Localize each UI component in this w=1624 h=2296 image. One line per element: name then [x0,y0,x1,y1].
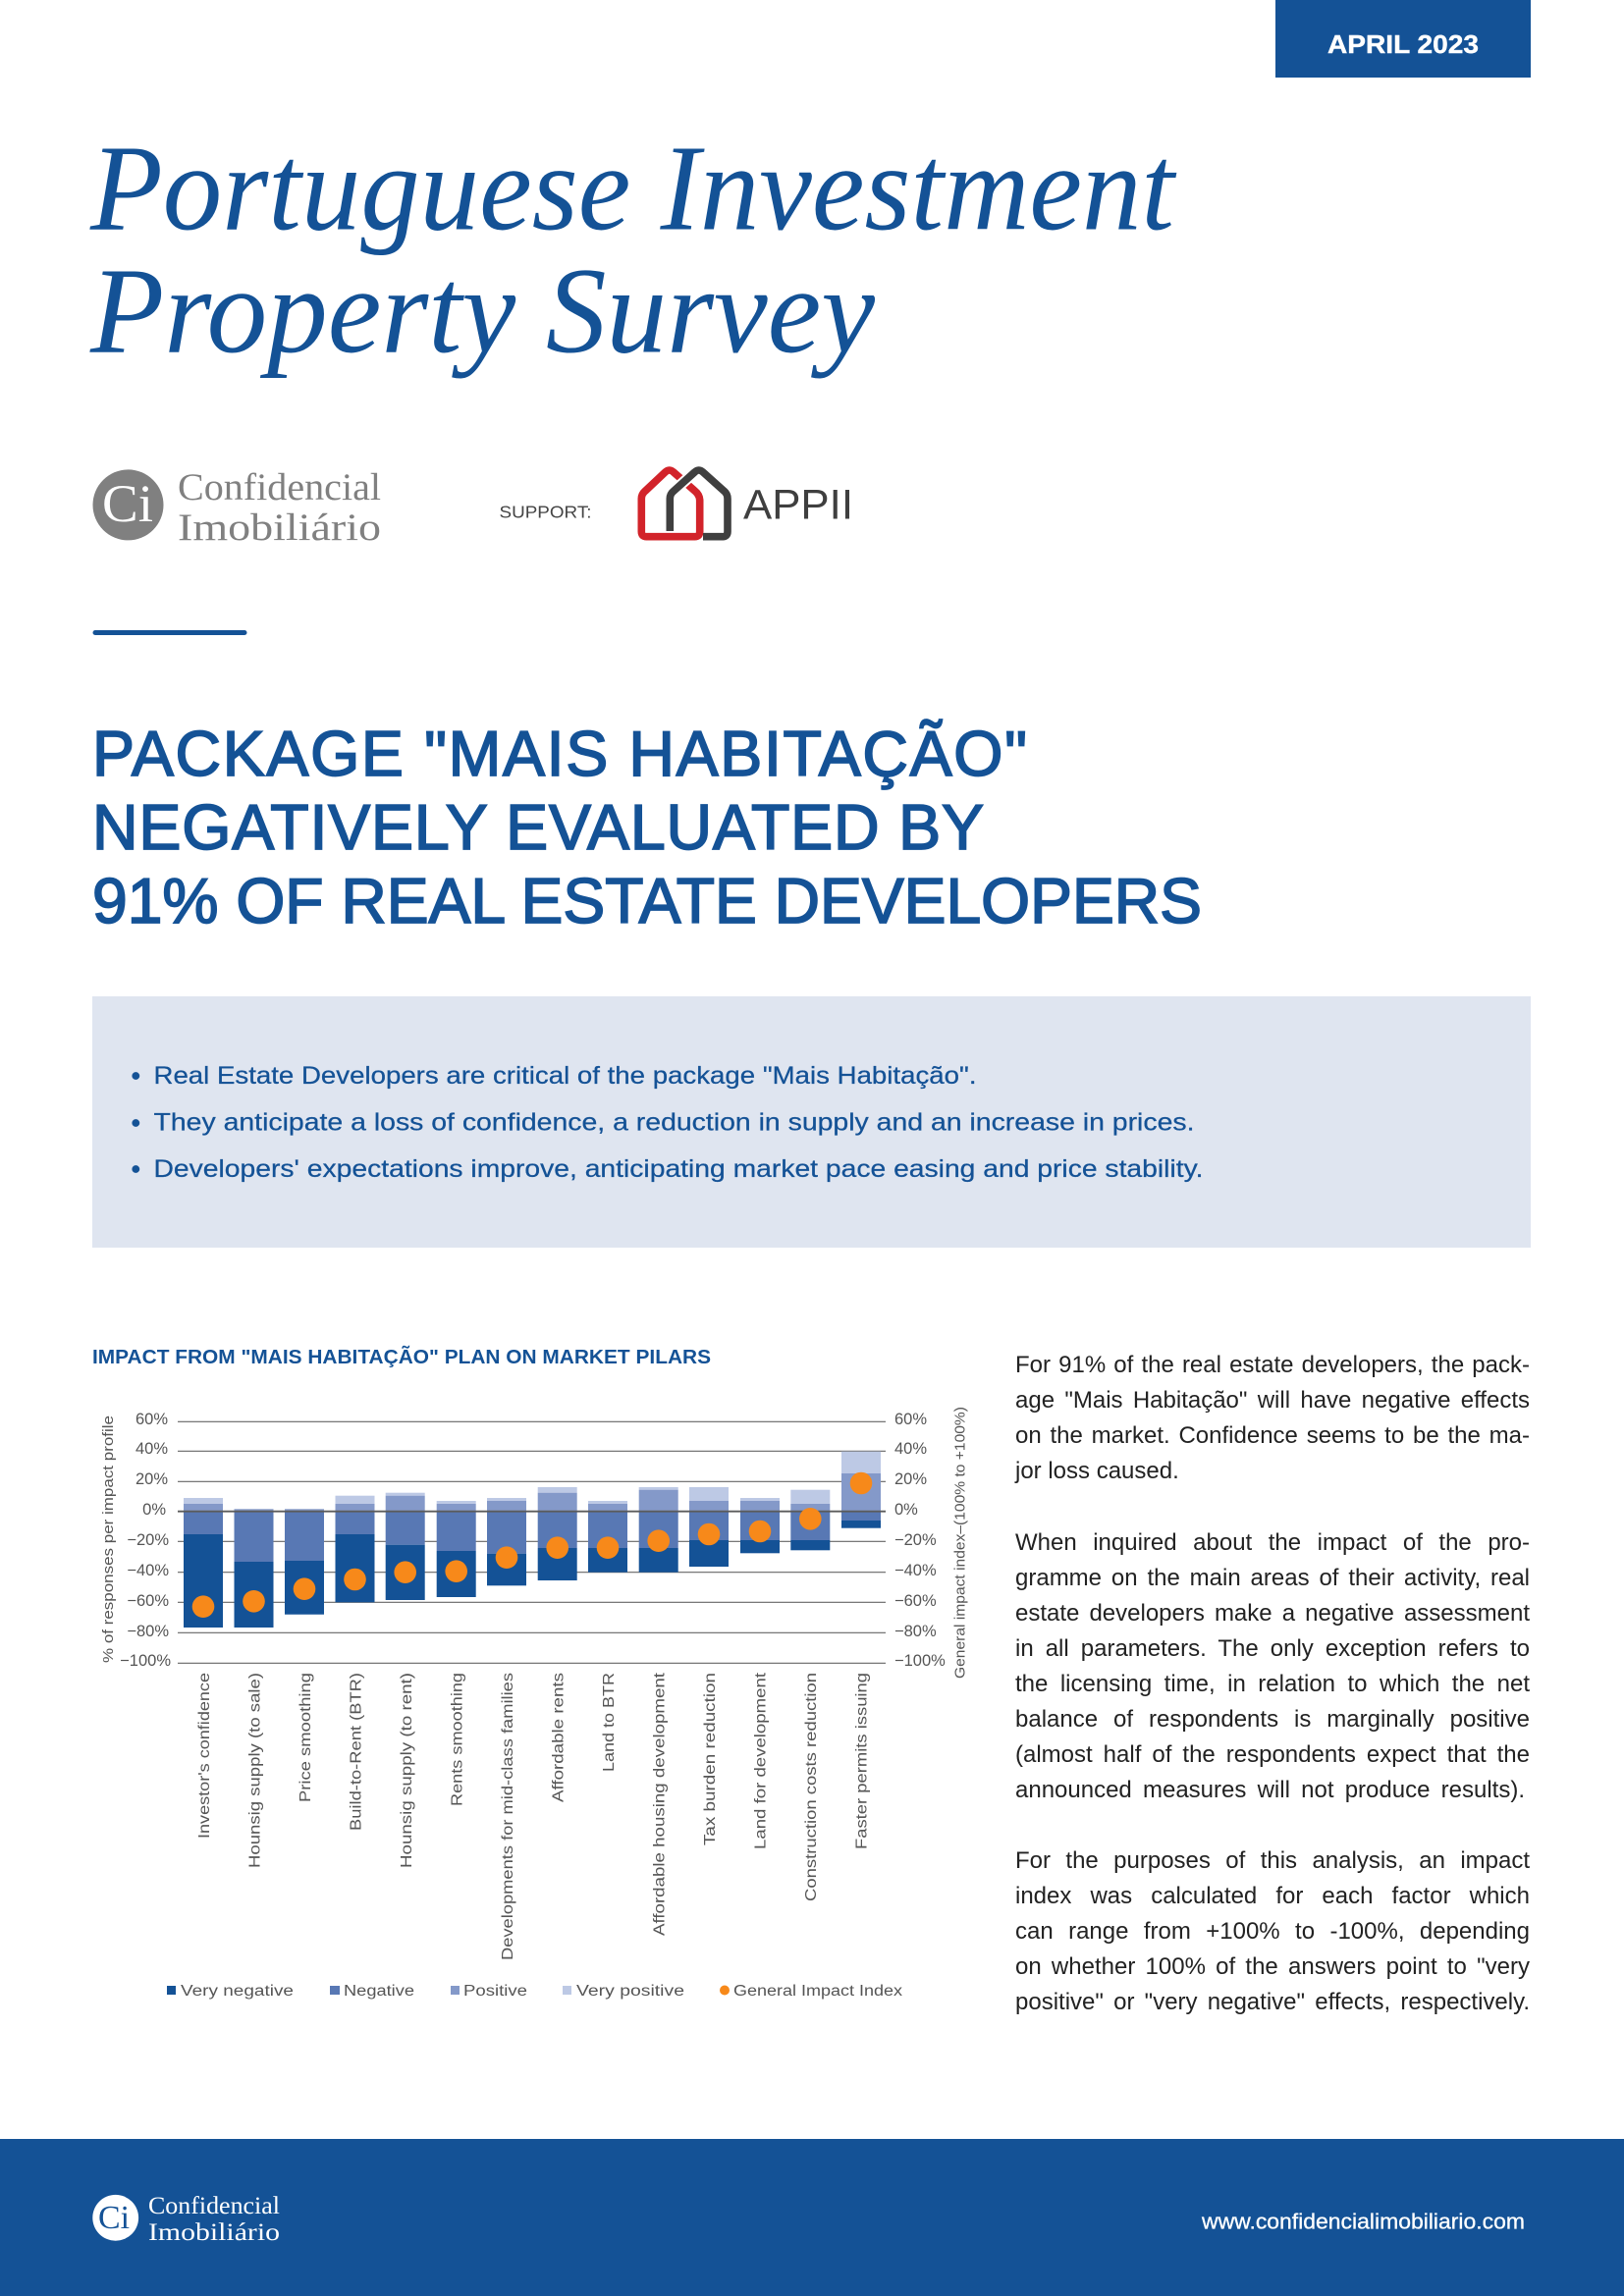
bullet list [132,1062,1204,1183]
body text: paragraph 2: in all parameters. The only exception refers to [1015,1635,1530,1662]
bullet list: Real Estate Developers are critical of the package "Mais Habitação". [153,1062,977,1090]
title: Property Survey [89,243,875,379]
left axis labels: −20% [127,1531,169,1549]
right axis labels: 20% [894,1470,927,1488]
legend: Negative [344,1983,414,2000]
legend: Very negative [181,1983,294,2000]
left axis labels: 40% [135,1440,168,1458]
left axis labels: −60% [127,1592,169,1610]
footer logo [92,2191,280,2246]
logo: APPII [641,470,853,537]
right axis title: General impact index–(100% to +100%) [952,1407,968,1679]
category labels: Construction costs reduction [803,1673,820,1901]
left axis labels: −40% [127,1562,169,1579]
category labels: Land to BTR [601,1673,618,1772]
body text: paragraph 1: age "Mais Habitação" will have negative effects [1015,1386,1530,1414]
headline: NEGATIVELY EVALUATED BY [92,792,984,863]
category labels: Rents smoothing [450,1673,465,1806]
right axis labels: −100% [894,1652,946,1670]
logo: Confidencial Imobiliário: Ci [102,474,153,533]
category labels: Land for development [752,1672,770,1849]
left axis labels: 0% [142,1501,166,1519]
logo: Confidencial Imobiliário [92,466,381,549]
legend: General Impact Index [733,1983,902,2000]
left axis labels: −100% [120,1652,171,1670]
title [89,122,1177,379]
logo: APPII: APPII [743,482,853,528]
body text: paragraph 2: the licensing time, in relation to which the net [1015,1671,1530,1697]
website: www.confidencialimobiliario.com [1201,2210,1525,2234]
footer logo: Confidencial [148,2191,280,2219]
body text: paragraph 2: balance of respondents is marginally positive [1015,1706,1530,1733]
left axis labels: 60% [135,1411,168,1428]
category labels: Affordable rents [550,1673,568,1802]
body text: paragraph 2: announced measures will not produce results). [1015,1777,1525,1803]
headline: PACKAGE "MAIS HABITAÇÃO" [92,719,1027,789]
category labels: Developments for mid-class families [500,1673,516,1960]
headline [92,719,1202,936]
body text: paragraph 2: (almost half of the respondents expect that the [1015,1741,1530,1768]
category labels: Hounsig supply (to sale) [247,1673,263,1868]
right axis labels: 0% [894,1501,918,1519]
category labels [196,1672,870,1960]
body text: paragraph 3: For the purposes of this analysis, an impact [1015,1847,1530,1874]
bars: very positive [184,1452,881,1504]
right axis labels: −40% [894,1562,937,1579]
footer band [0,2139,1624,2296]
accent rule [92,630,247,635]
logo: Confidencial Imobiliário: Imobiliário [178,507,381,549]
body text: paragraph 3: on whether 100% of the answers point to "very [1015,1953,1530,1980]
left axis labels: 20% [135,1470,168,1488]
left axis labels [120,1411,171,1670]
body text: paragraph 3: positive" or "very negative" effects, respectively. [1015,1989,1530,2015]
headline: 91% OF REAL ESTATE DEVELOPERS [92,866,1202,936]
panel: key points [92,996,1531,1248]
chart heading: IMPACT FROM "MAIS HABITAÇÃO" PLAN ON MARKET PILARS [92,1346,711,1368]
category labels: Affordable housing development [652,1672,668,1936]
right axis labels: −20% [894,1531,937,1549]
category labels: Investor's confidence [196,1673,213,1839]
right axis labels: −60% [894,1592,937,1610]
category labels: Hounsig supply (to rent) [399,1673,415,1868]
legend: Very positive [576,1983,684,2000]
body text: paragraph 2: estate developers make a negative assessment [1015,1600,1530,1627]
date badge [1275,0,1531,78]
body text: paragraph 2 [1015,1529,1530,1803]
right axis labels: 40% [894,1440,927,1458]
bars: very negative [184,1521,881,1628]
logo: Confidencial Imobiliário: Confidencial [178,466,381,508]
category labels: Tax burden reduction [702,1673,719,1845]
legend: Positive [463,1983,527,2000]
support label: SUPPORT: [499,503,591,522]
footer logo: Imobiliário [148,2217,280,2246]
bullet list: They anticipate a loss of confidence, a reduction in supply and an increase in prices. [153,1109,1194,1137]
category labels: Faster permits issuing [854,1673,870,1849]
body text: paragraph 1: For 91% of the real estate developers, the pack- [1015,1351,1530,1378]
body text: paragraph 3: index was calculated for each factor which [1015,1883,1530,1909]
body text: paragraph 3: can range from +100% to -100%, depending [1015,1918,1530,1945]
footer logo: Ci [98,2200,130,2236]
title: Portuguese Investment [89,122,1177,257]
body text: paragraph 1: jor loss caused. [1015,1457,1179,1484]
right axis labels [894,1411,946,1670]
bullet list: Developers' expectations improve, anticipating market pace easing and price stability. [153,1155,1204,1183]
right axis labels: −80% [894,1623,937,1640]
right axis labels: 60% [894,1411,927,1428]
legend [167,1983,902,2000]
body text: paragraph 2: When inquired about the impact of the pro- [1015,1529,1530,1556]
general impact index dots [192,1472,872,1618]
body text: paragraph 1 [1014,1351,1530,1484]
category labels: Price smoothing [298,1673,314,1802]
body text: paragraph 1: on the market. Confidence seems to be the ma- [1015,1421,1530,1449]
left axis labels: −80% [127,1623,169,1640]
left axis title: % of responses per impact profile [100,1415,117,1663]
body text: paragraph 3 [1015,1847,1530,2015]
bars: negative [184,1512,881,1562]
body text: paragraph 2: gramme on the main areas of their activity, real [1015,1565,1530,1591]
bars: positive [184,1473,881,1512]
stacked bar chart [100,1407,968,2000]
date badge: APRIL 2023 [1327,31,1479,59]
category labels: Build-to-Rent (BTR) [348,1673,365,1831]
